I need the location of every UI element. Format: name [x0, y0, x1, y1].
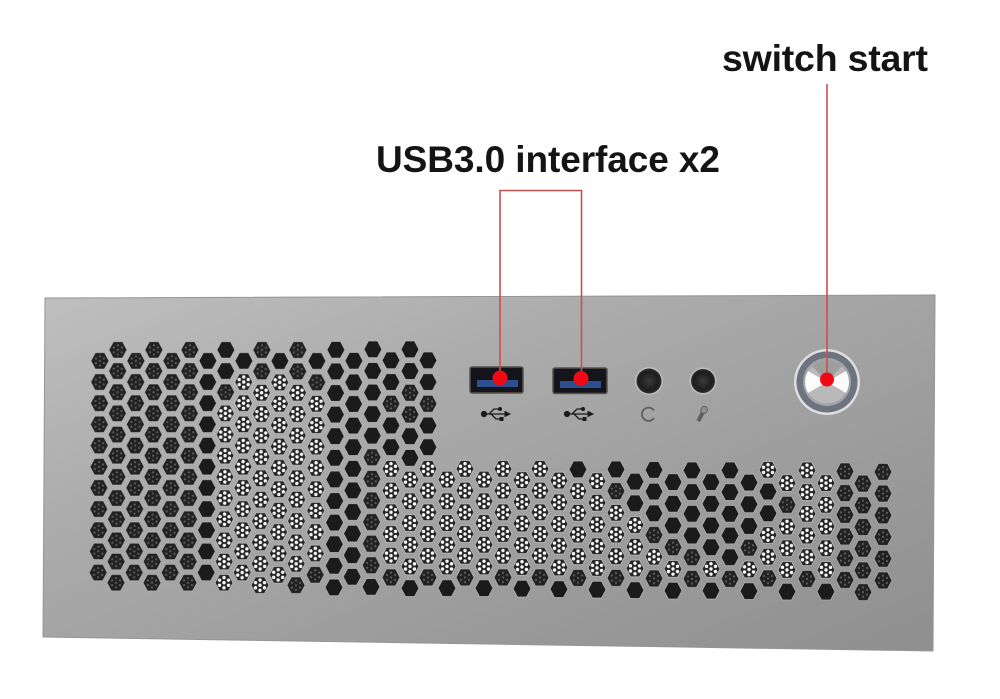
icon: microphone symbol: [696, 406, 708, 422]
panel: grey chassis front: [43, 295, 935, 651]
marker: switch: [820, 372, 834, 386]
marker: USB port 1: [492, 370, 508, 386]
icon: USB symbol 1: [481, 408, 510, 420]
callout lines: USB bracket: [500, 190, 582, 378]
USB 3.0 port 2: [553, 368, 607, 394]
icon: USB symbol 2: [564, 408, 593, 420]
audio jack: headphone: [635, 367, 663, 395]
marker: USB port 2: [574, 371, 588, 386]
vent: upper-left perforated hexagon block: [89, 338, 438, 599]
audio jack: microphone: [690, 368, 716, 394]
heading: USB3.0 interface x2: USB3.0 interface x2: [376, 139, 720, 180]
vent: lower-right perforated hexagon block: [438, 458, 892, 603]
icon: headphone symbol: [642, 408, 654, 421]
callout line: switch: [826, 84, 828, 380]
USB 3.0 port 1: [470, 367, 523, 393]
power switch button: [794, 349, 860, 415]
heading: switch start: switch start: [722, 37, 928, 79]
